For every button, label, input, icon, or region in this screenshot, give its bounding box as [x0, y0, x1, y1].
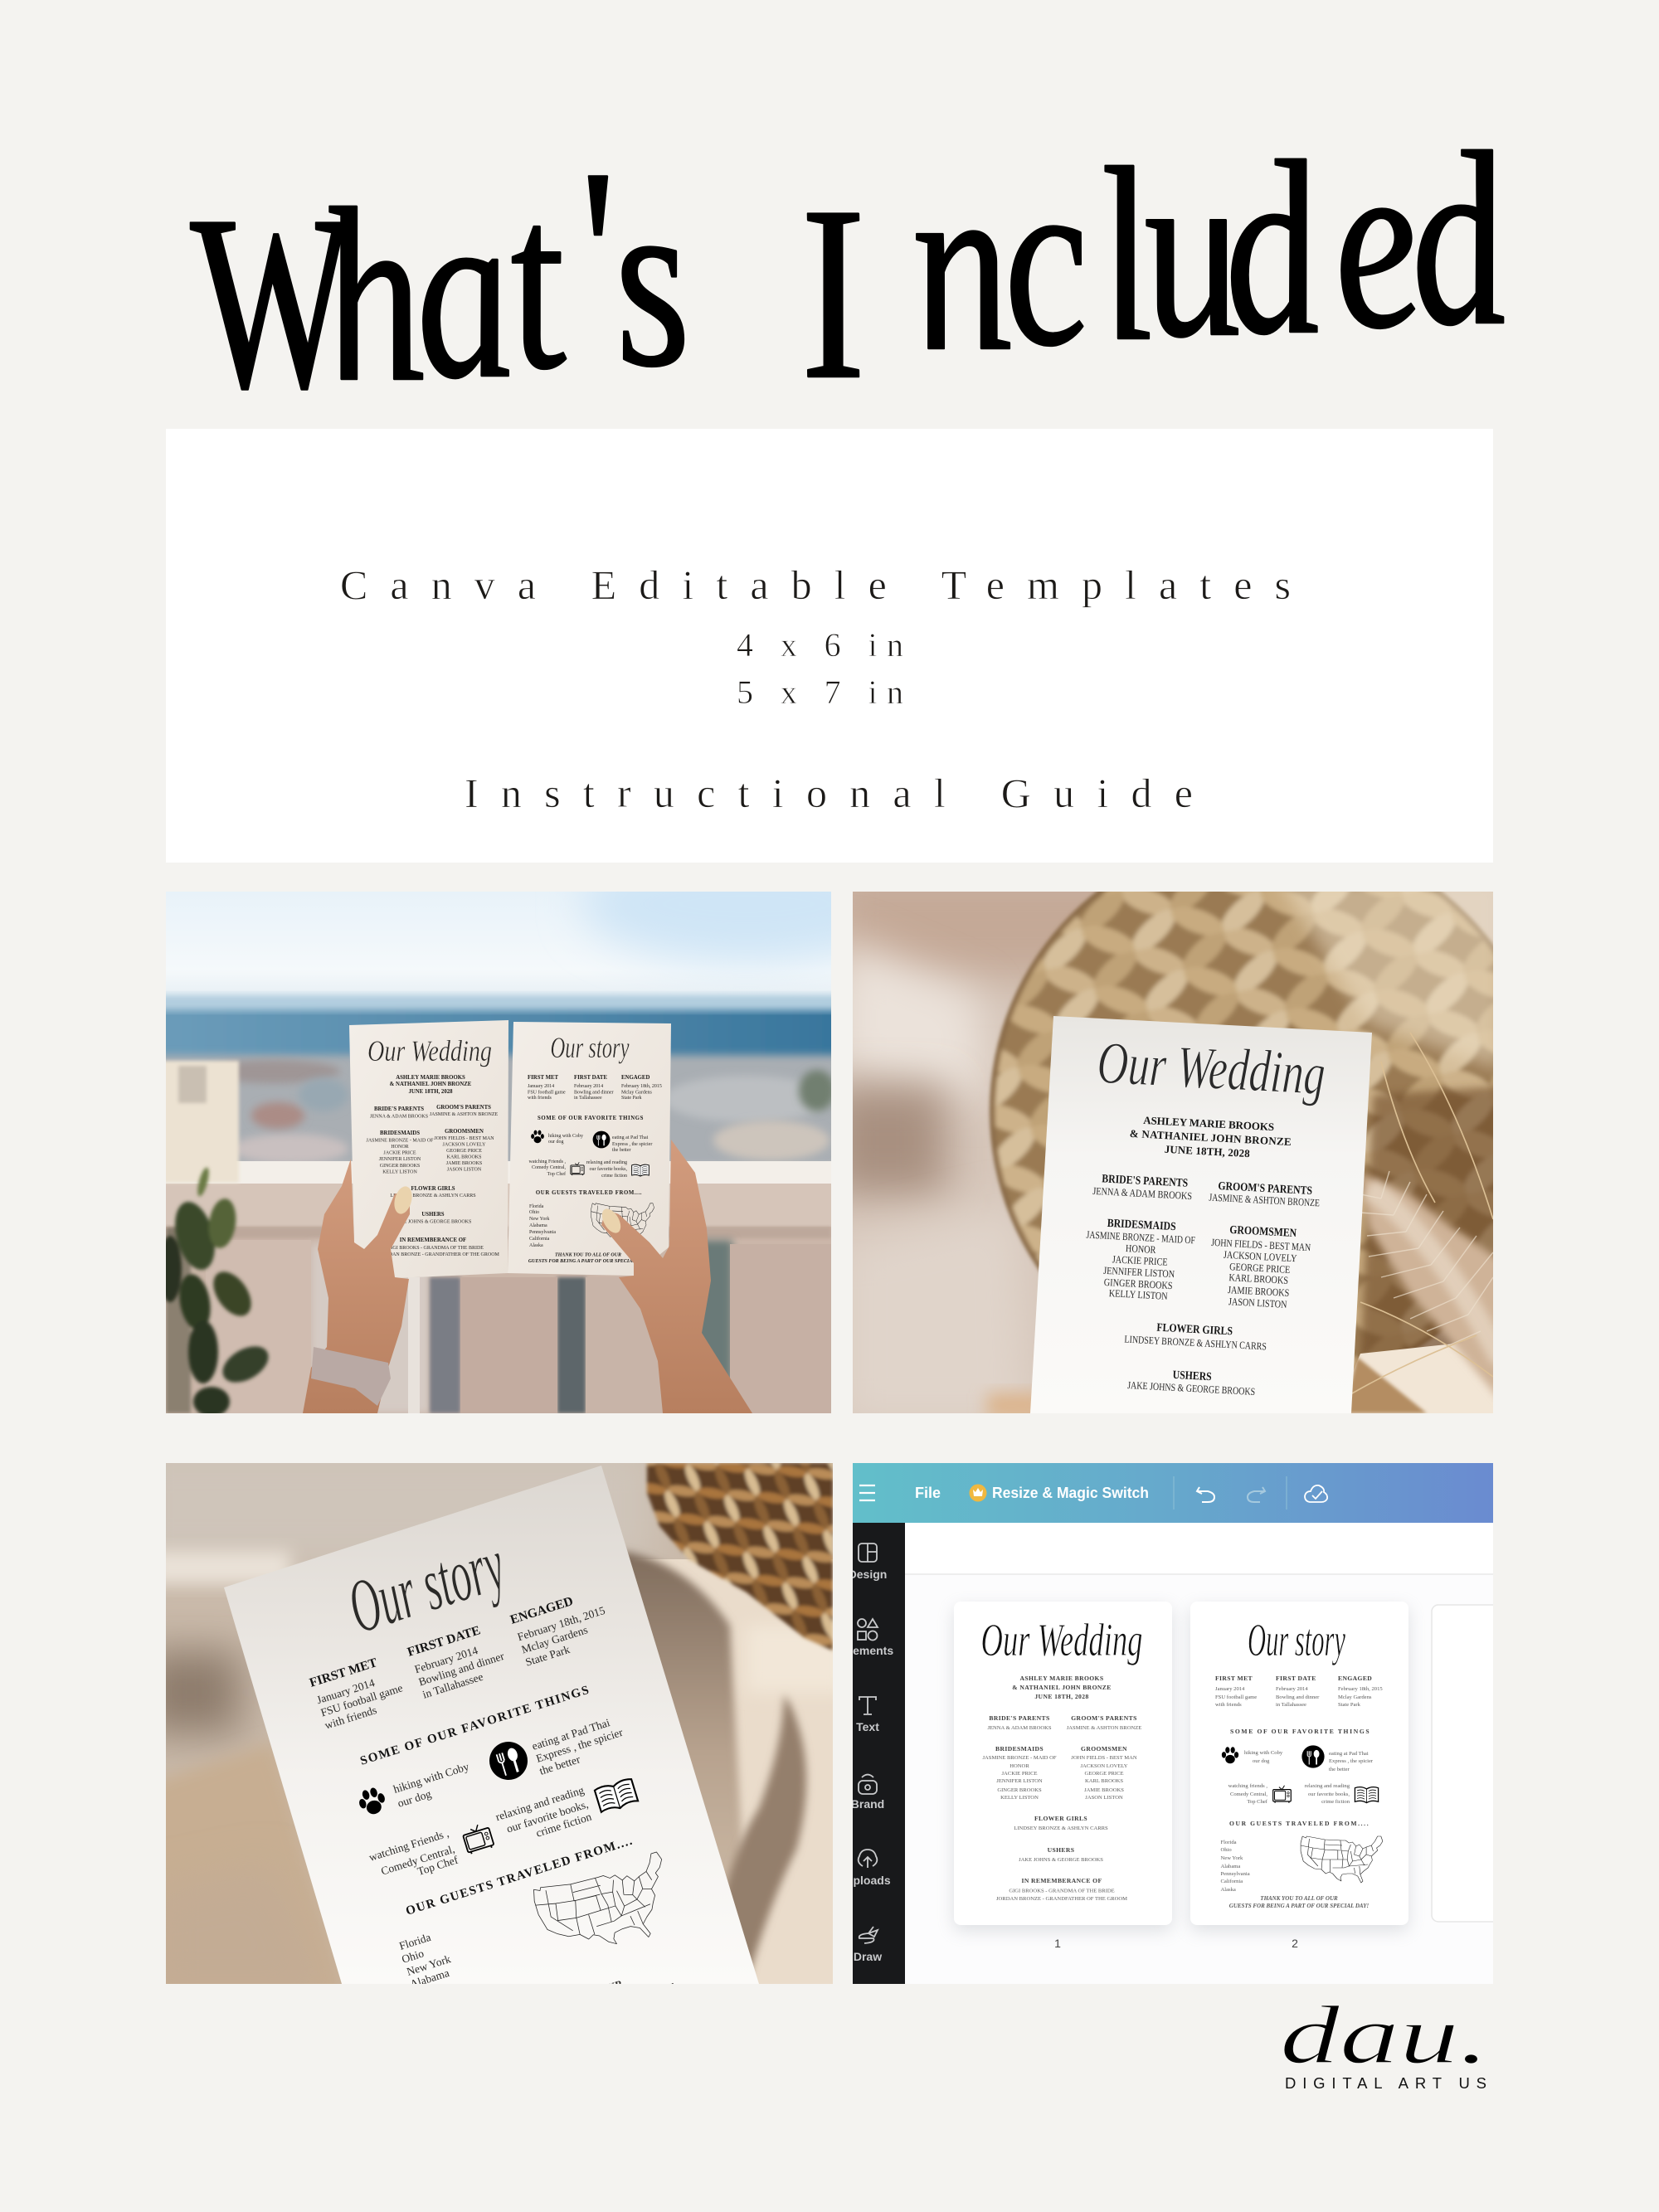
photo: hands holding program on balcony [166, 892, 831, 1413]
icon: paw [356, 1785, 388, 1817]
card 1: Our Wedding: IN REMEMBERANCE OF [1021, 1877, 1102, 1884]
label: elements: Elements [842, 1644, 893, 1657]
card 2: Our story: our dog [1253, 1758, 1270, 1764]
icon: tv [461, 1822, 494, 1855]
printed page: Our story [224, 1466, 759, 2073]
card 1: Our Wedding: BRIDE'S PARENTS [989, 1714, 1050, 1722]
card 1: Our Wedding: JASON LISTON [1085, 1795, 1123, 1801]
right page: Our story: FIRST DATE [574, 1075, 607, 1081]
printed page: Our Wedding: Our Wedding [1096, 1029, 1327, 1107]
right page: Our story: SOME OF OUR FAVORITE THINGS [538, 1116, 644, 1121]
left page: Our Wedding: JACKIE PRICE [383, 1151, 416, 1156]
card 2: Our story: our favorite books, [1308, 1791, 1350, 1797]
printed page: Our Wedding: KELLY LISTON [1108, 1288, 1168, 1302]
left page: Our Wedding: ASHLEY MARIE BROOKS [396, 1075, 465, 1081]
left page: Our Wedding: JASON LISTON [447, 1168, 482, 1173]
map [591, 1203, 654, 1245]
printed page: Our story: ENGAGED [508, 1594, 575, 1627]
icon: paw [531, 1130, 544, 1143]
label: text: Text [856, 1720, 879, 1733]
size: 5 x 7 in: 5 x 7 in [737, 673, 903, 711]
left page: Our Wedding [349, 1020, 508, 1278]
printed page: Our Wedding: KARL BROOKS [1228, 1272, 1288, 1286]
printed page: Our Wedding: GROOMSMEN [1229, 1223, 1297, 1239]
printed page: Our story: the better [538, 1753, 582, 1777]
icon: cloud saved [1305, 1485, 1327, 1502]
pillar [158, 1061, 239, 1183]
printed page: Our story: relaxing and reading [494, 1783, 586, 1823]
card 1: Our Wedding: JOHN FIELDS - BEST MAN [1071, 1755, 1137, 1761]
left page: Our Wedding: JACKSON LOVELY [443, 1143, 486, 1148]
printed page: Our story: GUESTS FOR BEING A PART OF OUR SPECIAL DAY! [416, 1981, 677, 2073]
card 2: Our story: Pennsylvania [1221, 1871, 1250, 1877]
right page: Our story: Pennsylvania [529, 1230, 556, 1235]
left page: Our Wedding: KELLY LISTON [382, 1169, 417, 1174]
right page: Our story: in Tallahassee [574, 1096, 602, 1101]
printed page: Our Wedding: GEORGE PRICE [1229, 1262, 1291, 1276]
right page: Our story: hiking with Coby [548, 1134, 583, 1139]
heading: Canva Editable Templates: Canva Editable Templates [340, 562, 1291, 608]
card 1: Our Wedding: GIGI BROOKS - GRANDMA OF THE BRIDE [1009, 1888, 1115, 1894]
card 2: Our story: State Park [1338, 1702, 1361, 1708]
right page: Our story: Alaska [529, 1243, 543, 1248]
size: 4 x 6 in: 4 x 6 in [737, 626, 903, 664]
right page: Our story: California [529, 1236, 550, 1242]
right page: Our story: FSU football game [528, 1090, 566, 1095]
right page: Our story: relaxing and reading [586, 1160, 627, 1165]
icon: book [1355, 1787, 1379, 1803]
label: draw: Draw [854, 1950, 882, 1963]
left page: Our Wedding: Our Wedding [367, 1034, 492, 1067]
printed page: Our Wedding: JAMIE BROOKS [1228, 1285, 1290, 1299]
card 2: Our story: Alabama [1221, 1864, 1240, 1869]
photo: Our story page on draped fabric [166, 1463, 833, 2073]
icon: redo [1248, 1487, 1265, 1502]
right page: Our story [508, 1022, 671, 1276]
printed page: Our story: Express , the spicier [534, 1726, 625, 1765]
printed page: Our story: with friends [324, 1704, 378, 1732]
printed page: Our story: February 2014 [413, 1644, 479, 1675]
printed page: Our story: FSU football game [319, 1681, 404, 1719]
right page: Our story: FIRST MET [528, 1075, 559, 1081]
card 1: Our Wedding: HONOR [1010, 1763, 1029, 1769]
printed page: Our story: FIRST MET [308, 1655, 379, 1690]
printed page: Our story: Bowling and dinner [417, 1650, 506, 1689]
printed page: Our Wedding: JASON LISTON [1228, 1296, 1287, 1310]
left page: Our Wedding: JENNIFER LISTON [379, 1157, 421, 1162]
card 1: Our Wedding: USHERS [1048, 1846, 1074, 1854]
card 2: Our story: with friends [1215, 1702, 1242, 1708]
left page: Our Wedding: FLOWER GIRLS [411, 1186, 455, 1192]
sidebar [842, 1523, 905, 1984]
heading: Instructional Guide: Instructional Guide [465, 770, 1193, 816]
left hand [303, 1159, 415, 1413]
printed page: Our story: SOME OF OUR FAVORITE THINGS [358, 1684, 591, 1768]
card 1: Our Wedding: JUNE 18TH, 2028 [1034, 1693, 1089, 1700]
right page: Our story: Bowling and dinner [574, 1090, 614, 1095]
card 2: Our story: February 2014 [1276, 1686, 1308, 1692]
card 1: Our Wedding: KELLY LISTON [1000, 1795, 1039, 1801]
card 2: Our story: FIRST DATE [1276, 1675, 1316, 1682]
printed page: Our Wedding: JOHN FIELDS - BEST MAN [1211, 1237, 1311, 1253]
left page: Our Wedding: JORDAN BRONZE - GRANDFATHER OF THE GROOM [380, 1252, 500, 1257]
icon: plate [593, 1131, 610, 1148]
pampas grass [1352, 1033, 1501, 1402]
printed page: Our story: eating at Pad Thai [530, 1716, 611, 1753]
right page: Our story: our favorite books, [589, 1166, 627, 1172]
card 1: Our Wedding: GEORGE PRICE [1084, 1771, 1124, 1777]
printed page: Our Wedding: GROOM'S PARENTS [1218, 1179, 1312, 1197]
icon: tv [571, 1162, 584, 1175]
card 2: Our story: ENGAGED [1338, 1675, 1372, 1682]
printed page: Our Wedding: JACKSON LOVELY [1224, 1250, 1297, 1265]
right page: Our story: Mclay Gardens [621, 1090, 652, 1095]
right page: Our story: Our story [551, 1031, 630, 1064]
card 2: Our story: GUESTS FOR BEING A PART OF OUR SPECIAL DAY! [1229, 1903, 1369, 1909]
card 2: Our story: in Tallahassee [1276, 1702, 1306, 1708]
tan fabric [622, 1551, 751, 1999]
printed page: Our Wedding: JAKE JOHNS & GEORGE BROOKS [1127, 1380, 1255, 1398]
card 2: Our story: hiking with Coby [1244, 1750, 1283, 1756]
left page: Our Wedding: JAMIE BROOKS [446, 1161, 482, 1166]
icon: draw [859, 1927, 878, 1943]
left page: Our Wedding: GROOMSMEN [445, 1129, 484, 1135]
card 2: Our story: Mclay Gardens [1338, 1694, 1372, 1700]
printed page: Our story: January 2014 [315, 1676, 377, 1706]
card 1: Our Wedding: JACKSON LOVELY [1080, 1763, 1128, 1769]
icon: brand [859, 1775, 877, 1794]
right page: Our story: Express , the spicier [612, 1142, 652, 1147]
map [1301, 1836, 1383, 1883]
card 1: Our Wedding: & NATHANIEL JOHN BRONZE [1012, 1684, 1112, 1691]
icon: text [859, 1697, 876, 1714]
left page: Our Wedding: GIGI BROOKS - GRANDMA OF THE BRIDE [387, 1246, 484, 1251]
card 1: Our Wedding: KARL BROOKS [1085, 1778, 1123, 1784]
icon: elements [858, 1619, 878, 1641]
printed page: Our Wedding: JUNE 18TH, 2028 [1164, 1143, 1251, 1159]
right page: Our story: with friends [528, 1095, 552, 1101]
card 2: Our story: California [1221, 1879, 1243, 1884]
printed page: Our story: crime fiction [534, 1810, 593, 1840]
printed page: Our Wedding: FLOWER GIRLS [1156, 1320, 1233, 1338]
left page: Our Wedding: JUNE 18TH, 2028 [408, 1089, 453, 1095]
card 2: Our story: New York [1221, 1855, 1243, 1861]
icon: book [632, 1164, 649, 1176]
card 2: Our story: FSU football game [1215, 1694, 1257, 1700]
left page: Our Wedding: JAKE JOHNS & GEORGE BROOKS [395, 1219, 471, 1224]
woven basket [990, 832, 1549, 1391]
card 1: Our Wedding: GROOM'S PARENTS [1071, 1714, 1137, 1722]
thumbnail [598, 1206, 625, 1236]
left page: Our Wedding: BRIDE'S PARENTS [374, 1106, 424, 1112]
photo: program on woven basket [853, 892, 1493, 1413]
printed page: Our story: Mclay Gardens [520, 1623, 589, 1656]
icon: menu [859, 1485, 875, 1500]
fabric shadow [705, 1692, 806, 1999]
printed page: Our Wedding [1030, 1016, 1372, 1413]
printed page: Our story: Our story [338, 1521, 514, 1650]
icon: crown [969, 1485, 987, 1501]
card 1: Our Wedding: JORDAN BRONZE - GRANDFATHER OF THE GROOM [996, 1896, 1127, 1902]
printed page: Our Wedding: JENNA & ADAM BROOKS [1092, 1186, 1192, 1202]
table surface [1335, 1339, 1493, 1413]
right page: Our story: State Park [621, 1096, 642, 1101]
printed page: Our story: February 18th, 2015 [516, 1604, 606, 1643]
canvas shadows [954, 1607, 1172, 1931]
right page: Our story: Comedy Central, [532, 1165, 566, 1170]
card 1: Our Wedding: JASMINE & ASHTON BRONZE [1067, 1725, 1141, 1731]
card 1: Our Wedding: LINDSEY BRONZE & ASHLYN CARRS [1014, 1826, 1108, 1831]
resize button: Resize & Magic Switch [992, 1485, 1149, 1501]
printed page: Our story: Alabama [408, 1966, 450, 1991]
card 2: Our story: Florida [1221, 1840, 1237, 1845]
card 1: Our Wedding: GINGER BROOKS [997, 1787, 1042, 1793]
right page: Our story: February 18th, 2015 [621, 1084, 662, 1089]
printed page: Our story: hiking with Coby [392, 1760, 470, 1796]
right page: Our story: our dog [548, 1140, 564, 1145]
card 2: Our story: THANK YOU TO ALL OF OUR [1260, 1895, 1338, 1902]
printed page: Our Wedding: HONOR [1126, 1243, 1156, 1256]
right page: Our story: ENGAGED [621, 1075, 649, 1081]
right page: Our story: February 2014 [574, 1084, 603, 1089]
right page: Our story: January 2014 [528, 1084, 554, 1089]
printed page: Our story: watching Friends , [367, 1827, 450, 1864]
card 1: Our Wedding: BRIDESMAIDS [995, 1745, 1044, 1753]
card 2: Our story: Ohio [1221, 1847, 1232, 1853]
title: What's Included [160, 101, 1535, 440]
left page: Our Wedding: GROOM'S PARENTS [436, 1105, 491, 1111]
printed page: Our story: OUR GUESTS TRAVELED FROM.... [404, 1835, 634, 1918]
card 2: Our story: SOME OF OUR FAVORITE THINGS [1230, 1728, 1370, 1735]
left page: Our Wedding: GEORGE PRICE [446, 1149, 482, 1154]
card 2: Our story: Alaska [1221, 1887, 1236, 1893]
card 2: Our story: OUR GUESTS TRAVELED FROM.... [1229, 1820, 1369, 1827]
page number 2: 2 [1292, 1937, 1298, 1950]
left page: Our Wedding: JOHN FIELDS - BEST MAN [434, 1136, 494, 1141]
dried wheat [647, 1463, 833, 1650]
right page: Our story: watching Friends , [529, 1159, 566, 1164]
right page: Our story: GUESTS FOR BEING A PART OF OUR SPECIAL DAY! [528, 1259, 648, 1264]
right page: Our story: eating at Pad Thai [612, 1135, 649, 1140]
top toolbar [853, 1463, 1493, 1523]
icon: design [859, 1544, 877, 1562]
card 2: Our story: FIRST MET [1215, 1675, 1253, 1682]
printed page: Our Wedding: ASHLEY MARIE BROOKS [1143, 1114, 1275, 1133]
printed page: Our Wedding: JASMINE BRONZE - MAID OF [1086, 1230, 1195, 1247]
card 2: Our story: eating at Pad Thai [1329, 1751, 1369, 1757]
printed page: Our Wedding: GINGER BROOKS [1103, 1277, 1173, 1291]
printed page: Our story: New York [405, 1952, 452, 1978]
left page: Our Wedding: BRIDESMAIDS [380, 1130, 420, 1136]
screenshot: Canva editor [842, 1463, 1493, 1984]
printed page: Our story: Ohio [400, 1947, 426, 1966]
printed page: Our story: Top Chef [416, 1853, 460, 1878]
printed page: Our story: THANK YOU TO ALL OF OUR [478, 1978, 624, 2035]
label: uploads: Uploads [844, 1874, 891, 1887]
left page: Our Wedding: JENNA & ADAM BROOKS [370, 1115, 428, 1120]
printed page: Our story: State Park [524, 1643, 572, 1669]
page number 1: 1 [1054, 1937, 1061, 1950]
printed page: Our Wedding: JASMINE & ASHTON BRONZE [1209, 1192, 1320, 1209]
label: brand: Brand [851, 1797, 884, 1811]
left page: Our Wedding: LINDSEY BRONZE & ASHLYN CARRS [390, 1194, 476, 1198]
card 1: Our Wedding: JACKIE PRICE [1001, 1771, 1038, 1777]
card 2: Our story [1190, 1602, 1408, 1925]
card 2: Our story: Our story [1248, 1615, 1345, 1666]
card 1: Our Wedding: GROOMSMEN [1081, 1745, 1127, 1753]
logo wordmark: DIGITAL ART US [1285, 2074, 1486, 2092]
card 1: Our Wedding: JASMINE BRONZE - MAID OF [982, 1755, 1057, 1761]
card 2: Our story: Bowling and dinner [1276, 1694, 1320, 1700]
map [531, 1851, 683, 1966]
icon: uploads [859, 1850, 877, 1868]
bracelet [311, 1347, 391, 1406]
right page: Our story: crime fiction [601, 1173, 627, 1179]
card 2: Our story: January 2014 [1215, 1686, 1245, 1692]
printed page: Our story: in Tallahassee [421, 1670, 484, 1701]
left page: Our Wedding: JASMINE BRONZE - MAID OF [366, 1138, 434, 1143]
printed page: Our Wedding: USHERS [1172, 1368, 1212, 1383]
printed page: Our story: Comedy Central, [379, 1843, 456, 1878]
left page: Our Wedding: USHERS [421, 1212, 445, 1218]
left page: Our Wedding: HONOR [391, 1145, 409, 1150]
printed page: Our Wedding: JENNIFER LISTON [1103, 1266, 1175, 1281]
plant [158, 1166, 275, 1417]
printed page: Our Wedding: BRIDESMAIDS [1107, 1216, 1176, 1232]
railing [166, 1161, 831, 1413]
right page: Our story: Ohio [529, 1210, 539, 1215]
printed page: Our Wedding: BRIDE'S PARENTS [1102, 1171, 1189, 1189]
printed page: Our story: Florida [397, 1931, 432, 1952]
card 1: Our Wedding [954, 1602, 1172, 1925]
card 2: Our story: watching friends , [1228, 1783, 1267, 1789]
card 1: Our Wedding: JAMIE BROOKS [1084, 1787, 1124, 1793]
card 2: Our story: relaxing and reading [1305, 1783, 1350, 1789]
card 1: Our Wedding: ASHLEY MARIE BROOKS [1020, 1675, 1103, 1682]
printed page: Our story: FIRST DATE [406, 1623, 482, 1660]
card 2: Our story: Comedy Central, [1230, 1791, 1267, 1797]
icon: plate [1301, 1745, 1325, 1768]
card 2: Our story: Express , the spicier [1329, 1758, 1374, 1764]
card 1: Our Wedding: Our Wedding [980, 1615, 1143, 1666]
card 2: Our story: crime fiction [1321, 1799, 1350, 1805]
icon: tv [1273, 1786, 1291, 1803]
printed page: Our Wedding: JACKIE PRICE [1112, 1254, 1168, 1268]
right page: Our story: OUR GUESTS TRAVELED FROM.... [536, 1190, 642, 1196]
right page: Our story: Top Chef [547, 1171, 566, 1177]
printed page: Our story: our favorite books, [505, 1798, 590, 1835]
card 1: Our Wedding: JAKE JOHNS & GEORGE BROOKS [1019, 1857, 1103, 1863]
left page: Our Wedding: KARL BROOKS [447, 1155, 481, 1159]
logo script: dau. [1280, 1989, 1489, 2081]
printed page: Our Wedding: LINDSEY BRONZE & ASHLYN CARRS [1124, 1334, 1267, 1353]
logo: digital art us [1280, 1989, 1489, 2092]
right page: Our story: THANK YOU TO ALL OF OUR [555, 1252, 621, 1257]
card 2: Our story: the better [1329, 1767, 1350, 1772]
icon: paw [1222, 1747, 1238, 1763]
right hand [598, 1140, 752, 1413]
card 1: Our Wedding: JENNA & ADAM BROOKS [987, 1725, 1052, 1731]
right page: Our story: New York [529, 1217, 549, 1222]
right page: Our story: Florida [529, 1204, 544, 1209]
right page: Our story: the better [612, 1148, 630, 1153]
icon: book [594, 1778, 639, 1814]
label: design: Design [849, 1568, 887, 1581]
panel: included items [166, 429, 1493, 863]
left page: Our Wedding: JASMINE & ASHTON BRONZE [430, 1112, 499, 1117]
right page: Our story: Alabama [529, 1223, 547, 1228]
left page: Our Wedding: IN REMEMBERANCE OF [400, 1237, 466, 1243]
card 3: empty page [1432, 1605, 1515, 1922]
thumbnail [392, 1184, 415, 1216]
printed page: Our story: our dog [396, 1787, 433, 1810]
icon: undo [1197, 1487, 1214, 1502]
card 1: Our Wedding: FLOWER GIRLS [1034, 1815, 1087, 1822]
file menu: File [915, 1485, 941, 1501]
card 1: Our Wedding: JENNIFER LISTON [996, 1778, 1043, 1784]
card 2: Our story: Top Chef [1247, 1799, 1268, 1805]
icon: plate [484, 1737, 533, 1785]
card 2: Our story: February 18th, 2015 [1338, 1686, 1383, 1692]
printed page: Our Wedding: & NATHANIEL JOHN BRONZE [1129, 1127, 1292, 1148]
left page: Our Wedding: & NATHANIEL JOHN BRONZE [390, 1082, 472, 1087]
left page: Our Wedding: GINGER BROOKS [380, 1164, 420, 1169]
